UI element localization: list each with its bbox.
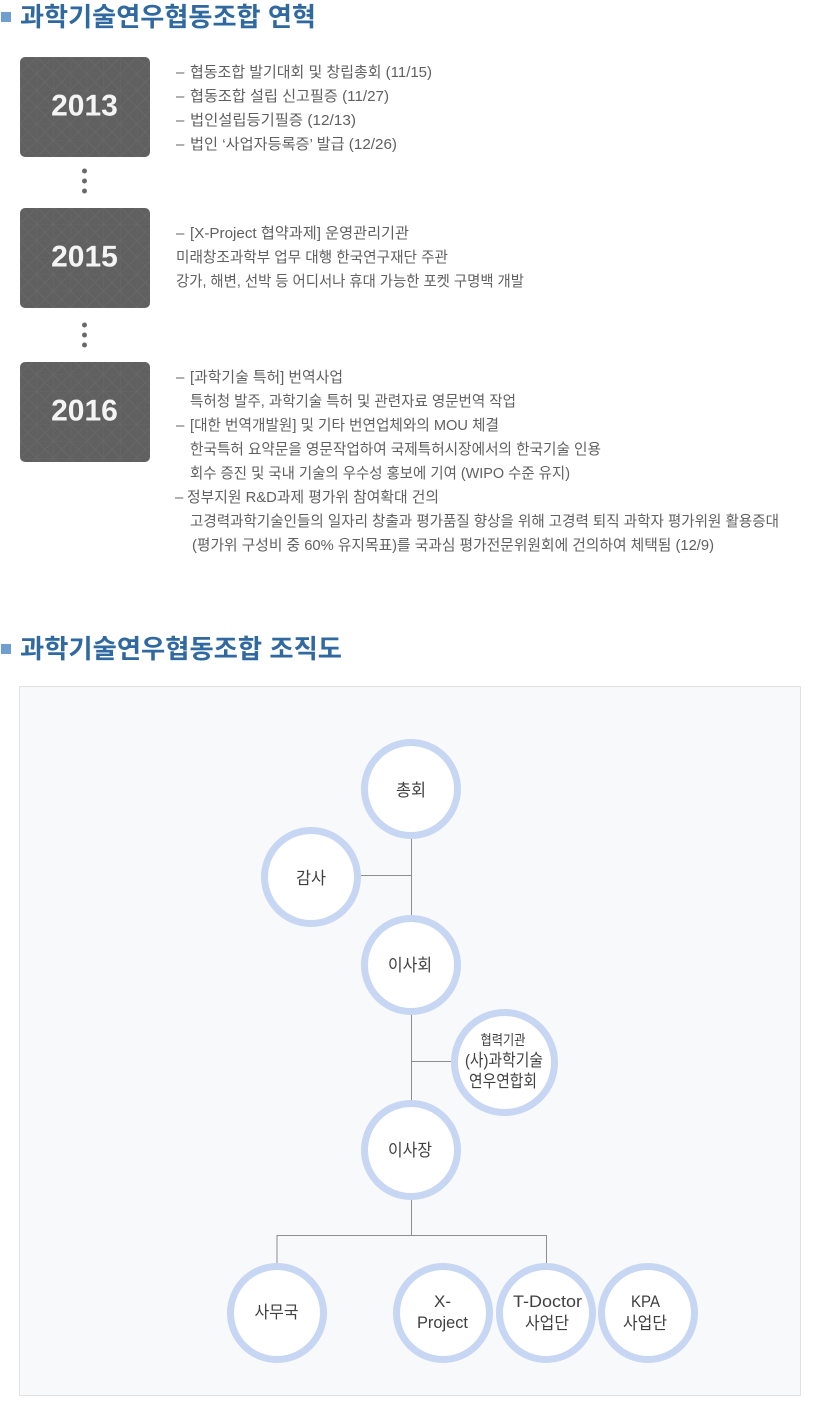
text block: 2013 events: 법인 ‘사업자등록증’ 발급 (12/26) (190, 136, 397, 153)
heading: history: 과학기술연우협동조합 연혁 (20, 2, 316, 32)
text block: 2016 events: 회수 증진 및 국내 기술의 우수성 홍보에 기여 (WIPO 수준 유지) (190, 464, 570, 482)
node: 사무국 (230, 1266, 324, 1360)
text block: 2016 events (175, 369, 779, 554)
text block: 2013 events: – (176, 64, 185, 81)
node: 감사: 감사 (296, 869, 326, 888)
year box: 2016 (20, 362, 150, 462)
text block: 2013 events (176, 64, 432, 153)
text block: 2016 events: 고경력과학기술인들의 일자리 창출과 평가품질 향상을 위해 고경력 퇴직 과학자 평가위원 활용증대 (190, 513, 779, 530)
node: 이사장: 이사장 (388, 1141, 432, 1160)
node: 사무국: 사무국 (254, 1303, 298, 1322)
text block: 2015 events: – (176, 225, 185, 242)
text block: 2013 events: – (176, 136, 185, 153)
year box: 2013 (20, 57, 150, 157)
node: 협력기관: 연우연합회 (469, 1072, 537, 1091)
text block: 2016 events: 한국특허 요약문을 영문작업하여 국제특허시장에서의 한국기술 인용 (190, 441, 601, 458)
text block: 2016 events: – (175, 489, 184, 506)
node: X-Project: X- (434, 1292, 451, 1311)
node: T-Doctor: 사업단 (525, 1314, 569, 1333)
text block: 2016 events: (평가위 구성비 중 60% 유지목표)를 국과심 평가전문위원회에 건의하여 체택됨 (12/9) (192, 537, 714, 554)
node: 협력기관: 협력기관 (480, 1032, 526, 1048)
node: 감사 (264, 830, 358, 924)
text block: 2016 events: – (176, 369, 185, 386)
connector dots (82, 322, 87, 348)
node: 협력기관 (454, 1012, 554, 1112)
text block: 2013 events: 협동조합 설립 신고필증 (11/27) (190, 88, 389, 105)
text block: 2015 events (176, 225, 524, 290)
text block: 2013 events: – (176, 88, 185, 105)
text block: 2016 events: – (176, 417, 185, 434)
node: 총회: 총회 (396, 781, 426, 800)
text block: 2013 events: 협동조합 발기대회 및 창립총회 (11/15) (190, 64, 432, 81)
node: 이사회: 이사회 (388, 956, 432, 975)
node: T-Doctor (500, 1266, 592, 1360)
node: T-Doctor: T-Doctor (513, 1292, 582, 1311)
text block: 2016 events: 특허청 발주, 과학기술 특허 및 관련자료 영문번역 작업 (190, 393, 516, 410)
text block: 2015 events: [X-Project 협약과제] 운영관리기관 (190, 225, 409, 242)
node: 총회 (364, 742, 458, 836)
node: KPA: 사업단 (623, 1314, 667, 1333)
heading: organization chart: 과학기술연우협동조합 조직도 (20, 634, 342, 664)
text block: 2015 events: 미래창조과학부 업무 대행 한국연구재단 주관 (176, 249, 448, 266)
node: 이사회 (364, 918, 458, 1012)
text block: 2015 events: 강가, 해변, 선박 등 어디서나 휴대 가능한 포켓 구명백 개발 (176, 273, 524, 290)
year box: 2015: 2015 (51, 240, 118, 274)
node: X-Project: Project (417, 1313, 468, 1332)
text block: 2016 events: 정부지원 R&D과제 평가위 참여확대 건의 (187, 489, 439, 506)
panel: organization chart (20, 686, 800, 1396)
year box: 2015 (20, 208, 150, 308)
year box: 2016: 2016 (51, 394, 118, 428)
node: 이사장 (364, 1104, 458, 1196)
node: X-Project (396, 1266, 490, 1360)
text block: 2013 events: 법인설립등기필증 (12/13) (190, 112, 356, 129)
connector lines (277, 835, 546, 1263)
text block: 2016 events: [과학기술 특허] 번역사업 (190, 369, 343, 386)
node: KPA: KPA (631, 1292, 661, 1311)
node: 협력기관: (사)과학기술 (465, 1051, 543, 1070)
text block: 2013 events: – (176, 112, 185, 129)
node: KPA (602, 1266, 694, 1360)
year box: 2013: 2013 (51, 90, 118, 122)
text block: 2016 events: [대한 번역개발원] 및 기타 번연업체와의 MOU 체결 (190, 417, 499, 434)
connector dots (82, 168, 87, 194)
